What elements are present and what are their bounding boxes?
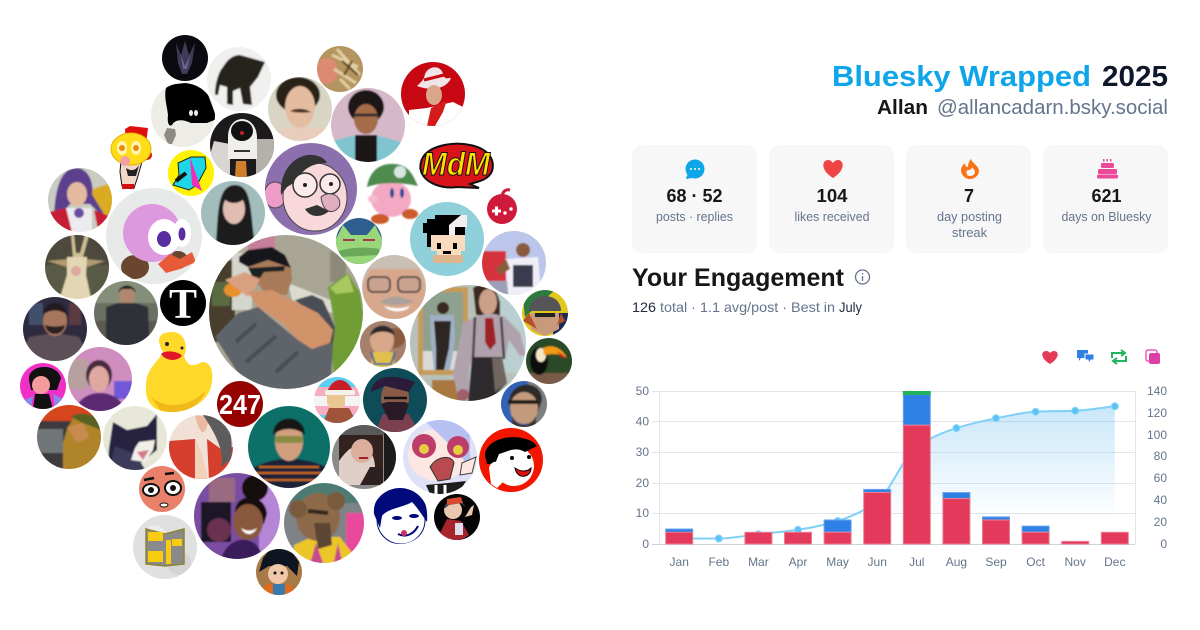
stat card: posts and replies: 68 · 52 [666,186,722,206]
left axis labels [636,384,649,551]
icon: reposts [1112,350,1126,364]
left axis labels: 10 [636,506,649,520]
avatar: toucan [526,338,572,384]
month labels: Sep [985,555,1007,569]
right axis labels: 80 [1154,449,1167,463]
avatar: main photo man drinking [209,235,363,389]
month labels: Jul [909,555,924,569]
avatar: older man with glasses [362,255,426,319]
avatar: Goku [256,548,302,595]
avatar: anime girl [403,420,477,494]
avatar: orange face with big eyes [139,466,185,512]
avatar: Kirby with Luigi hat [367,164,418,224]
month labels: Oct [1026,555,1046,569]
cumulative area [679,406,1115,544]
engagement summary: 126 [632,299,656,315]
stat card: posts and replies [632,145,757,253]
avatar: helmet cartoon [522,290,568,336]
avatar: black and white ghost face [210,113,274,177]
month labels [670,555,1125,569]
stat card: streak [906,145,1031,253]
right axis labels: 120 [1147,406,1167,420]
avatar: red circle cartoon face [479,428,543,492]
avatar: man in white shirt [482,231,546,295]
right axis labels: 40 [1154,493,1167,507]
month labels: May [826,555,849,569]
month labels: Dec [1104,555,1125,569]
engagement summary: July [839,299,862,315]
stat card: days on Bluesky: 621 [1092,186,1122,206]
engagement summary: total · 1.1 avg/post · Best in [660,299,835,315]
avatar: dark-haired woman [201,181,265,245]
avatar: illustrated woman in red [169,415,233,479]
avatar: pink ball creature [106,188,202,284]
left axis labels: 40 [636,414,649,428]
stat card: likes: 104 [816,186,848,206]
left axis labels: 50 [636,384,649,398]
icon: heart [823,160,843,178]
avatar: santa hat character on trans flag [314,377,360,423]
logo: 247: 247 [219,389,261,420]
heading: Your Engagement: Your Engagement [632,264,845,292]
icon: cake [1097,159,1118,178]
avatar: dark spiky figure [162,35,208,81]
avatar: man with sunglasses and striped shirt [248,406,330,488]
right axis labels: 20 [1154,515,1167,529]
avatar: bearded man profile [37,405,101,469]
month labels: Mar [748,555,769,569]
combo chart: monthly engagement [636,384,1167,569]
avatar: man in dark shirt [94,281,158,345]
stat card: days on Bluesky [1043,145,1168,253]
avatar: yellow clown [111,126,152,189]
avatar: rubber duck [146,332,212,412]
month labels: Jun [868,555,887,569]
icon: flame [961,159,979,179]
logo: yellow and grey book [133,515,197,579]
left axis labels: 30 [636,445,649,459]
month labels: Apr [789,555,807,569]
user identity line: @allancadarn.bsky.social [937,97,1168,119]
icon: replies [1077,350,1094,363]
icon: likes heart [1042,351,1058,364]
avatar: curly-haired man with glasses [331,88,405,162]
avatar: man with moustache [268,77,332,141]
left axis labels: 20 [636,476,649,490]
month labels: Jan [670,555,689,569]
avatar: bearded man [23,297,87,361]
avatar: woman in pink room [68,347,132,411]
avatar: pixel art man [410,202,484,276]
avatar: small anime character [434,494,480,540]
month labels: Nov [1065,555,1086,569]
avatar: red game apple [487,190,517,224]
stacked bars [666,392,1128,544]
user identity line: Allan [877,97,928,119]
stat card: days on Bluesky: days on Bluesky [1062,210,1152,224]
month labels: Feb [708,555,729,569]
avatar: black cat [207,47,271,111]
icon: chat bubble [686,160,704,179]
avatar: smiling woman with afro bun [187,466,287,566]
avatar: navy-haired boy illustration [372,486,428,544]
month labels: Aug [946,555,967,569]
chart legend icons [1042,350,1160,364]
left axis labels: 0 [642,537,649,551]
avatar: pink cartoon [20,363,66,409]
avatar: young man with black glasses [501,381,547,427]
avatar: purple-haired cosplayer [48,168,112,232]
avatar: man in suspenders [410,285,526,401]
stat card: streak: streak [952,226,988,240]
icon: info [856,270,870,284]
cumulative points [676,403,1118,542]
avatar: woman photo in frame [332,425,398,489]
avatar: yellow with cyan fox [168,150,214,196]
logo: New York Times T: T [169,282,197,328]
avatar: toddler [360,321,406,367]
logo: New York Times T [160,280,206,328]
stat card: streak: 7 [964,186,974,206]
avatar: brown dog in yellow shirt [276,475,372,571]
right axis labels: 100 [1147,428,1167,442]
stat card: likes: likes received [794,210,870,224]
avatar bubble cluster [15,26,579,595]
logo: MdM: MdM [422,146,491,182]
avatar: bearded anime man [363,368,427,432]
avatar: white goat [45,235,109,299]
logo: 247 [217,381,263,427]
right axis labels [1147,384,1167,551]
avatar: black and white cat [103,406,167,470]
avatar: man in white hat [401,62,465,126]
title: Bluesky Wrapped [832,61,1091,93]
avatar: green frog [336,218,382,264]
stat card: posts and replies: posts · replies [656,210,733,224]
right axis labels: 0 [1160,537,1167,551]
title: 2025 [1102,61,1168,93]
stat card: likes [769,145,894,253]
stat card: streak: day posting [937,210,1002,224]
icon: quotes [1146,350,1160,364]
right axis labels: 140 [1147,384,1167,398]
avatar: straw texture [317,46,363,92]
avatar: purple illustrated face [264,143,357,235]
right axis labels: 60 [1154,471,1167,485]
cumulative line [679,406,1115,538]
avatar: black blob drawing [151,81,217,147]
